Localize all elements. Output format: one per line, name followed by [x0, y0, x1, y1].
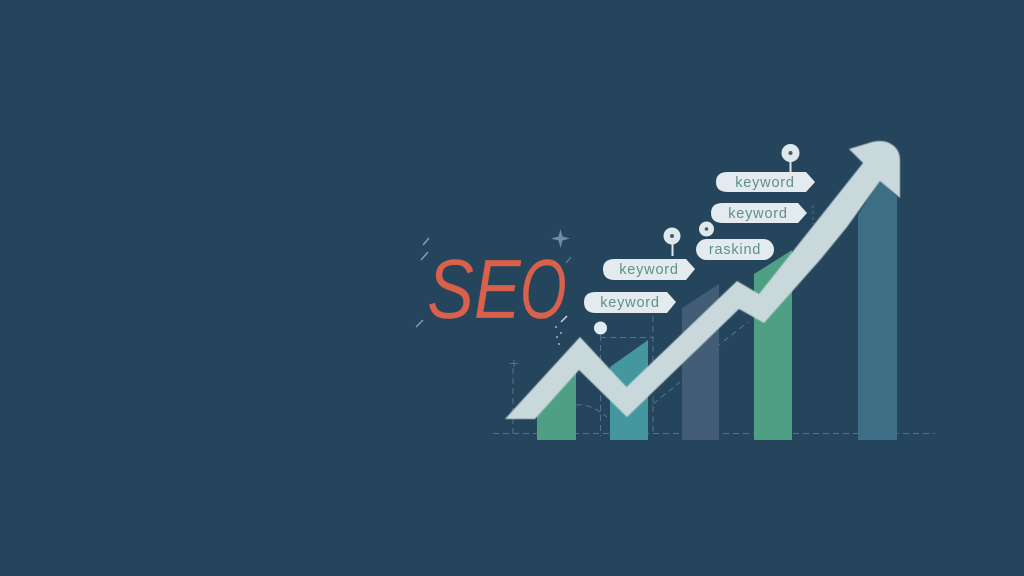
bar 2: teal	[610, 340, 648, 440]
tag: raskind: raskind	[709, 242, 761, 258]
tag: keyword (third)	[603, 259, 695, 280]
pin: top keyword	[782, 144, 800, 172]
SEO title: E	[474, 243, 522, 336]
bar 1: green	[537, 370, 576, 440]
tag: keyword (second)	[711, 203, 807, 223]
pin: third keyword	[664, 228, 680, 256]
bar 4: green	[754, 250, 792, 440]
tag: keyword (top)	[716, 172, 815, 192]
chart guide lines	[493, 205, 935, 436]
decorative ticks around SEO	[416, 238, 571, 344]
tag: keyword (second): keyword	[728, 206, 788, 222]
pin: fourth keyword	[594, 322, 607, 334]
tag: keyword (third): keyword	[619, 262, 679, 278]
tag: keyword (fourth): keyword	[600, 295, 660, 311]
SEO title: S	[427, 243, 474, 336]
tag: keyword (fourth)	[584, 292, 676, 313]
tag: keyword (top): keyword	[735, 175, 795, 191]
tag: raskind	[696, 239, 774, 260]
growth arrow	[505, 141, 900, 419]
pin: raskind	[699, 222, 714, 236]
SEO title	[427, 242, 567, 336]
sparkle decoration	[551, 229, 570, 248]
SEO title: O	[520, 242, 567, 336]
bar 3: muted slate	[682, 284, 719, 440]
bar 5: blue	[858, 180, 897, 440]
